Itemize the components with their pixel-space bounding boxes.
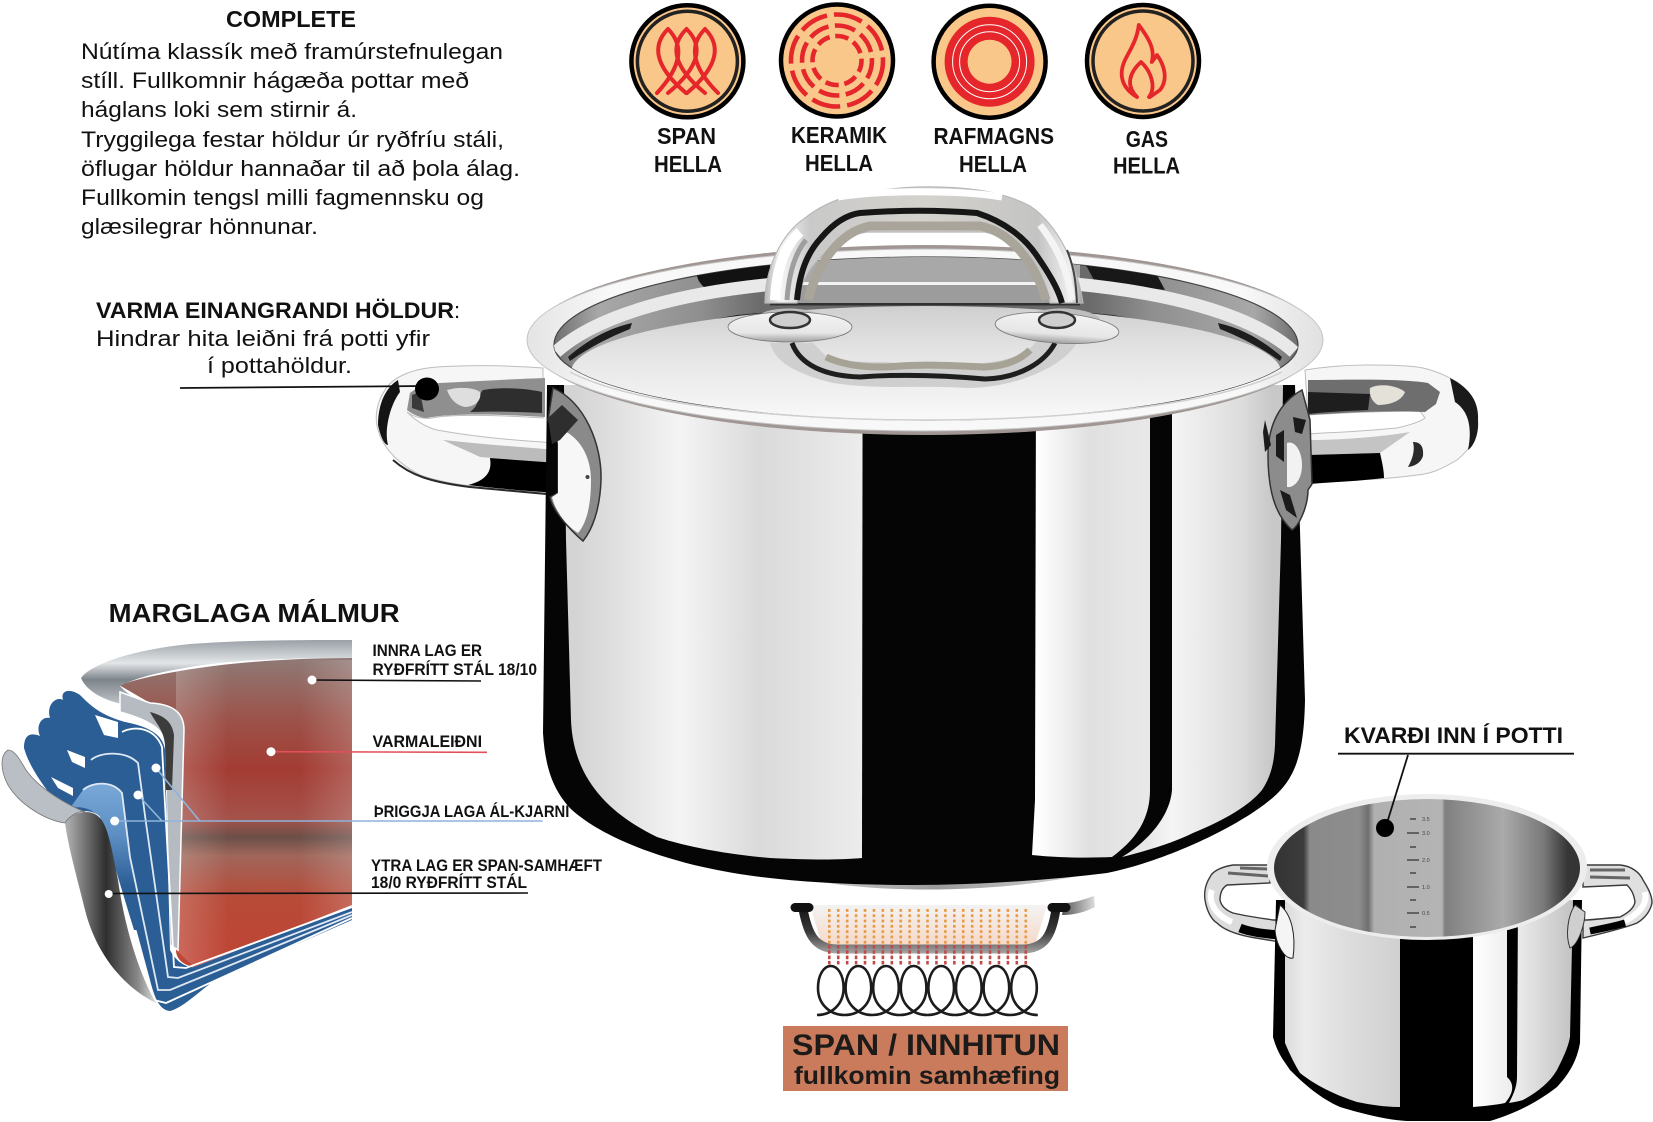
coil xyxy=(817,966,1038,1015)
small pot rim and interior xyxy=(1267,794,1587,940)
label: span hella: HELLA xyxy=(654,151,722,177)
gaps between layers xyxy=(51,715,118,796)
pan wall xyxy=(803,909,1056,949)
icon: rafmagns hella xyxy=(934,6,1046,118)
scale numbers: 1.0 xyxy=(1422,885,1430,891)
lid handle feet xyxy=(728,308,1120,347)
callout: inner layer: INNRA LAG ER xyxy=(372,642,482,660)
label: rafmagns hella: RAFMAGNS xyxy=(934,123,1054,149)
lid handle reflection xyxy=(770,340,1077,388)
callout: outer layer: YTRA LAG ER SPAN-SAMHÆFT xyxy=(371,857,602,875)
scale numbers xyxy=(1422,817,1430,917)
induction label box xyxy=(783,1026,1068,1091)
title: COMPLETE: COMPLETE xyxy=(226,6,356,32)
main pot xyxy=(376,187,1478,890)
callout: aluminium core: ÞRIGGJA LAGA ÁL-KJARNI xyxy=(374,802,569,821)
interior of pot wall xyxy=(119,658,352,967)
label: rafmagns hella xyxy=(934,123,1054,177)
handle callout xyxy=(96,298,460,400)
intro text block: stíll. Fullkomnir hágæða pottar með xyxy=(81,68,469,93)
callout: inner layer: RYÐFRÍTT STÁL 18/10 xyxy=(372,660,537,679)
induction label box: SPAN / INNHITUN xyxy=(792,1029,1060,1062)
callout: inner layer xyxy=(308,642,537,684)
pan handle xyxy=(1062,896,1095,915)
bottom reflection lip xyxy=(760,866,1115,890)
left side handle xyxy=(376,366,558,495)
label: rafmagns hella: HELLA xyxy=(959,151,1027,177)
inner steel strip xyxy=(120,692,184,950)
intro text block: Nútíma klassík með framúrstefnulegan xyxy=(81,39,503,64)
small pot xyxy=(1205,755,1652,1121)
heading: marglaga malmur: MARGLAGA MÁLMUR xyxy=(109,598,400,628)
handle callout: Hindrar hita leiðni frá potti yfir xyxy=(96,326,430,351)
icon: gas hella xyxy=(1087,5,1199,117)
white layer lines xyxy=(65,729,352,1003)
callout: heat conduction xyxy=(266,733,487,756)
scale numbers: 2.0 xyxy=(1422,858,1430,864)
label: gas hella: HELLA xyxy=(1113,152,1180,178)
scale numbers: 0.5 xyxy=(1422,911,1430,917)
label: keramik hella: KERAMIK xyxy=(791,122,887,148)
callout: outer layer xyxy=(105,857,602,898)
measuring scale xyxy=(1407,819,1419,927)
rim xyxy=(81,640,352,706)
intro text block xyxy=(81,39,520,239)
pan interior xyxy=(810,905,1047,945)
small pot plates xyxy=(1275,905,1585,958)
left handle plate xyxy=(548,388,601,541)
lower flange xyxy=(2,750,85,823)
label: gas hella: GAS xyxy=(1126,126,1168,152)
scale numbers: 3.5 xyxy=(1422,817,1430,823)
icon: keramik hella xyxy=(781,4,893,116)
label: span hella: SPAN xyxy=(657,123,716,149)
blue aluminium layers xyxy=(24,691,352,1011)
pan tips xyxy=(795,903,1066,912)
intro text block: Tryggilega festar höldur úr ryðfríu stáli, xyxy=(81,127,504,152)
lid handle arch xyxy=(765,187,1083,303)
label: span hella xyxy=(654,123,722,177)
handle callout: : xyxy=(454,298,460,323)
intro text block: háglans loki sem stirnir á. xyxy=(81,97,357,122)
icon: span hella xyxy=(631,5,743,117)
scale numbers: 3.0 xyxy=(1422,831,1430,837)
callout: outer layer: 18/0 RYÐFRÍTT STÁL xyxy=(371,873,527,892)
induction label box: fullkomin samhæfing xyxy=(794,1062,1060,1090)
intro text block: Fullkomin tengsl milli fagmennsku og xyxy=(81,185,484,210)
callout: aluminium core xyxy=(110,764,569,826)
label: keramik hella: HELLA xyxy=(805,150,873,176)
handle callout: í pottahöldur. xyxy=(207,353,352,378)
scale callout xyxy=(1376,755,1408,837)
right handle plate xyxy=(1263,390,1312,530)
callout: heat conduction: VARMALEIÐNI xyxy=(372,733,482,751)
label: keramik hella xyxy=(791,122,887,176)
heat dots xyxy=(828,909,1032,945)
small pot handles xyxy=(1205,865,1652,942)
induction diagram xyxy=(783,896,1095,1091)
label: gas hella xyxy=(1113,126,1180,178)
pot body xyxy=(543,385,1305,885)
intro text block: glæsilegrar hönnunar. xyxy=(81,214,318,239)
right side handle xyxy=(1305,365,1478,484)
heading: scale inside pot: KVARÐI INN Í POTTI xyxy=(1344,723,1563,748)
handle callout: VARMA EINANGRANDI HÖLDUR xyxy=(96,298,454,323)
small pot body xyxy=(1273,900,1582,1121)
outer steel layer xyxy=(65,812,156,1003)
lid xyxy=(527,245,1323,438)
intro text block: öflugar höldur hannaðar til að þola álag. xyxy=(81,156,520,181)
cross-section diagram xyxy=(2,640,602,1011)
lighter blue band xyxy=(70,784,146,930)
